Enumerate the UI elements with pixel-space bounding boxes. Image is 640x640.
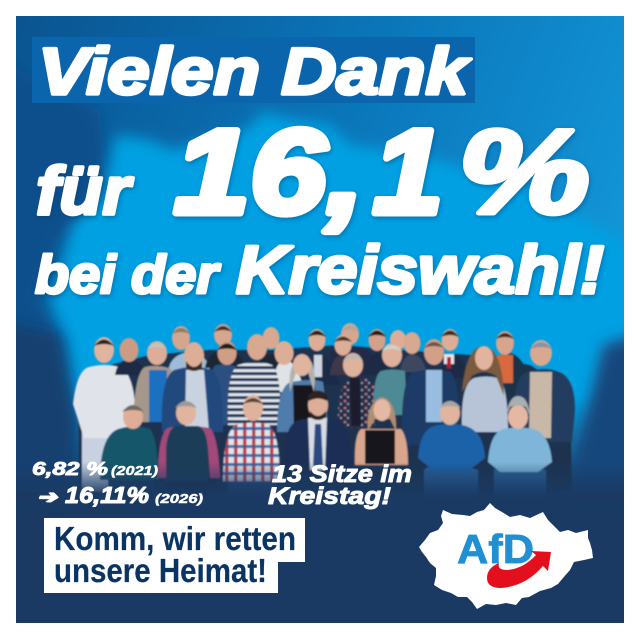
person: man in tan jacket <box>133 341 174 422</box>
person: older man in teal sweater <box>373 343 407 415</box>
person: back row man grey hair <box>330 323 370 376</box>
photo: group of candidates <box>73 323 575 501</box>
logo: red arrow swoosh <box>487 551 551 588</box>
heading: 16,1 %: 16, <box>174 105 364 239</box>
person: man dark hair <box>365 329 392 375</box>
heading: 16,1 %: 1 <box>373 105 443 239</box>
stat: 2021 result: 6,82 % <box>32 459 108 479</box>
heading: Kreiswahl!: Kreiswahl! <box>236 232 604 308</box>
person: man in leather jacket <box>513 340 575 485</box>
heading: bei der: bei der <box>35 245 221 305</box>
logo: white map shape <box>419 503 593 609</box>
person: front row woman light blue <box>488 396 552 498</box>
logo: AfD on white district map <box>419 503 593 609</box>
stat: 2021 result: (2021) <box>111 464 158 478</box>
slogan box: unsere Heimat! <box>54 552 267 589</box>
person: woman in floral blouse <box>338 353 378 428</box>
person: front row woman in black <box>355 397 408 465</box>
stat: 2026 result: 16,11% <box>65 482 149 508</box>
stat: 2026 result: (2026) <box>155 492 203 506</box>
person: front row man plaid shirt <box>223 395 280 501</box>
heading highlight box <box>32 37 475 103</box>
heading: Vielen Dank: Vielen Dank <box>38 34 472 108</box>
slogan box <box>44 518 305 593</box>
person: bald bearded man in navy suit <box>162 342 223 432</box>
heading: 16,1 % <box>174 105 590 239</box>
heading: 16,1 %: % <box>458 105 590 239</box>
person: bald man in white shirt <box>272 341 304 392</box>
person: young man in suit <box>306 329 340 385</box>
person: back row man checked shirt <box>168 326 210 372</box>
person: woman long brown hair <box>462 346 508 432</box>
person: front row woman maroon sleeves <box>158 401 220 499</box>
map silhouette behind text <box>44 108 624 434</box>
person: young man behind <box>330 334 357 375</box>
stat: 2026 result: ➔ <box>37 487 60 507</box>
person: man in navy suit <box>402 339 460 445</box>
heading: für: für <box>36 153 134 229</box>
person: front row woman in blue <box>418 401 485 498</box>
person: blonde woman with glasses <box>277 354 329 432</box>
person: back row man dark jacket <box>205 324 245 368</box>
stat: 2026 result <box>37 482 203 508</box>
stat: 2021 result <box>32 459 158 479</box>
person: front row woman teal <box>100 405 158 498</box>
callout: 13 Sitze im Kreistag: 13 Sitze im <box>272 461 412 488</box>
fade over lower part of photo <box>16 462 624 508</box>
slogan box: Komm, wir retten <box>54 520 296 557</box>
logo: AfD wordmark: AfD <box>457 526 534 572</box>
person: man orange shirt <box>494 331 532 398</box>
person: back row bald man <box>256 327 287 372</box>
person: man with red tie <box>440 329 468 378</box>
callout: 13 Sitze im Kreistag: Kreistag! <box>268 483 391 510</box>
person: front row man in suit with tie <box>283 390 353 470</box>
person: man in white shirt <box>73 337 135 492</box>
crowd backing shape <box>78 345 572 500</box>
callout: 13 Sitze im Kreistag <box>268 461 412 510</box>
person: man with glasses dark jacket <box>115 338 147 375</box>
person: man with glasses navy shirt <box>208 341 238 425</box>
person: bald men behind <box>390 330 426 372</box>
person: man in striped sweater <box>228 334 280 425</box>
